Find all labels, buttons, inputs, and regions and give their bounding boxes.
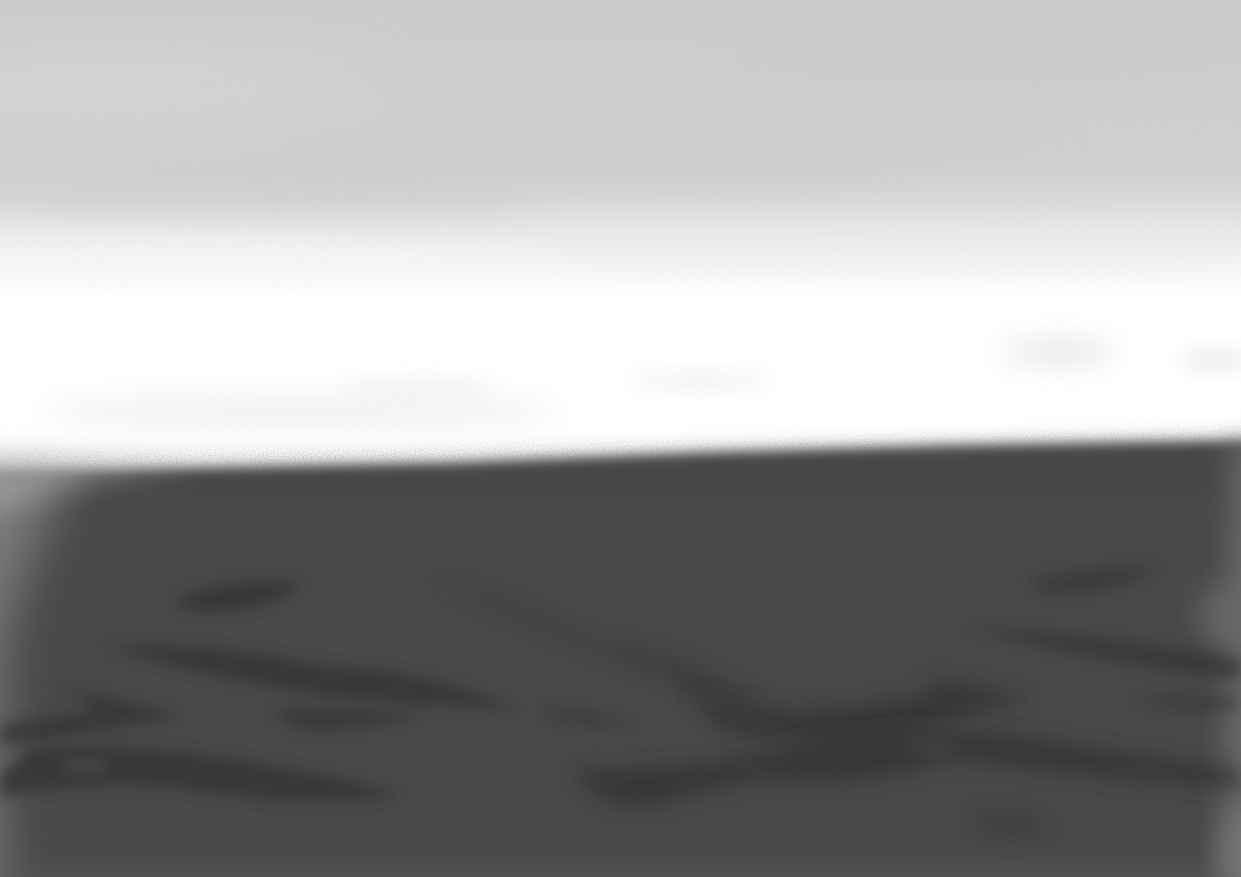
dark streaks on ground bbox=[0, 567, 1241, 838]
dark ground bbox=[0, 439, 1241, 877]
light glints on ground bbox=[59, 745, 956, 770]
sky background bbox=[0, 0, 1241, 520]
distant haze on horizon bbox=[40, 338, 1241, 430]
clouds in upper sky bbox=[0, 30, 1241, 276]
ground edge vignette bbox=[0, 440, 1241, 877]
grainy fade at horizon bbox=[0, 430, 1241, 472]
